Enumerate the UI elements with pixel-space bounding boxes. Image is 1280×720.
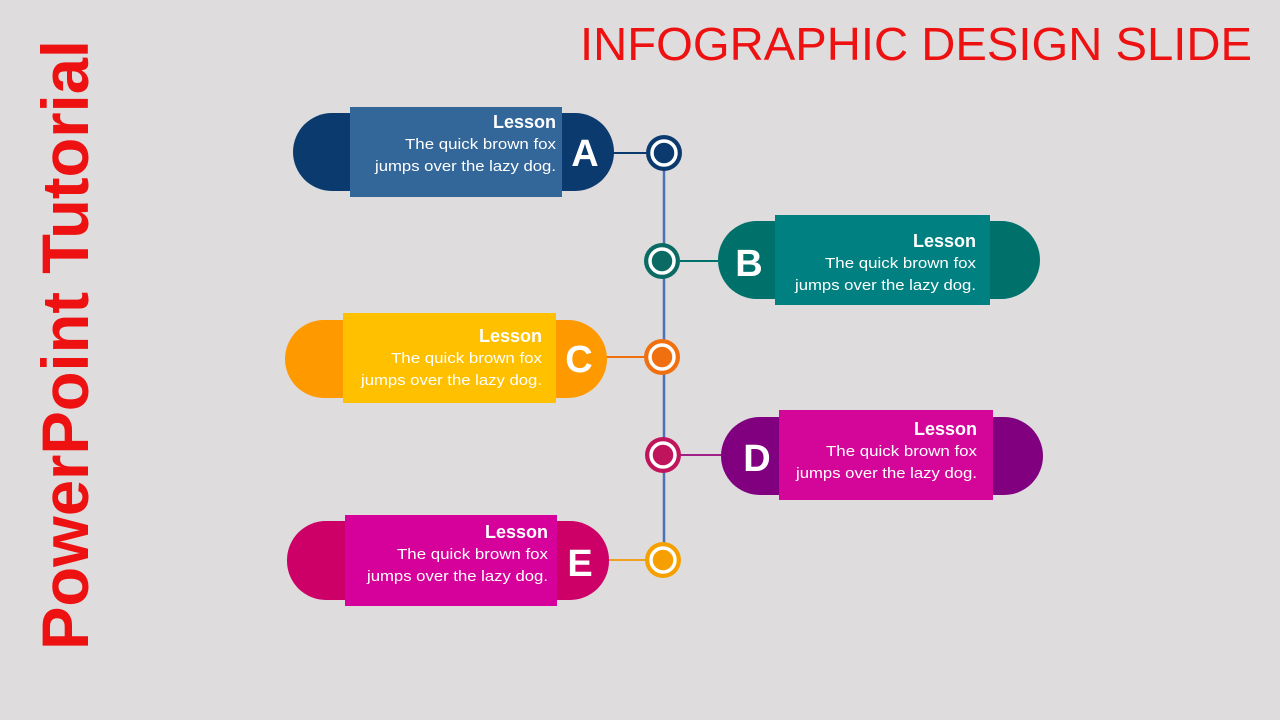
card B: B — [735, 243, 763, 285]
card C: jumps over the lazy dog. — [360, 372, 542, 389]
title: INFOGRAPHIC DESIGN SLIDE — [580, 18, 1252, 70]
card E: Lesson — [485, 522, 548, 542]
node C — [644, 339, 680, 375]
timeline vertical line — [663, 153, 665, 560]
card E — [287, 515, 681, 606]
card D: The quick brown fox — [826, 443, 978, 460]
node A — [646, 135, 682, 171]
card A: Lesson — [493, 112, 556, 132]
card B: jumps over the lazy dog. — [794, 277, 976, 294]
card A: The quick brown fox — [405, 136, 557, 153]
card C — [285, 313, 680, 403]
card D: D — [743, 438, 771, 480]
card B: Lesson — [913, 231, 976, 251]
card A: A — [571, 133, 599, 175]
vertical title: PowerPoint Tutorial — [28, 40, 102, 650]
card C: C — [565, 339, 593, 381]
card D: jumps over the lazy dog. — [795, 465, 977, 482]
card E: E — [567, 543, 593, 585]
card B — [644, 215, 1040, 305]
card D: Lesson — [914, 419, 977, 439]
card C: Lesson — [479, 326, 542, 346]
card E: jumps over the lazy dog. — [366, 568, 548, 585]
node D — [645, 437, 681, 473]
card C: The quick brown fox — [391, 350, 543, 367]
card A: jumps over the lazy dog. — [374, 158, 556, 175]
card D — [645, 410, 1043, 500]
node B — [644, 243, 680, 279]
card A — [293, 107, 682, 197]
card B: The quick brown fox — [825, 255, 977, 272]
node E — [645, 542, 681, 578]
card E: The quick brown fox — [397, 546, 549, 563]
